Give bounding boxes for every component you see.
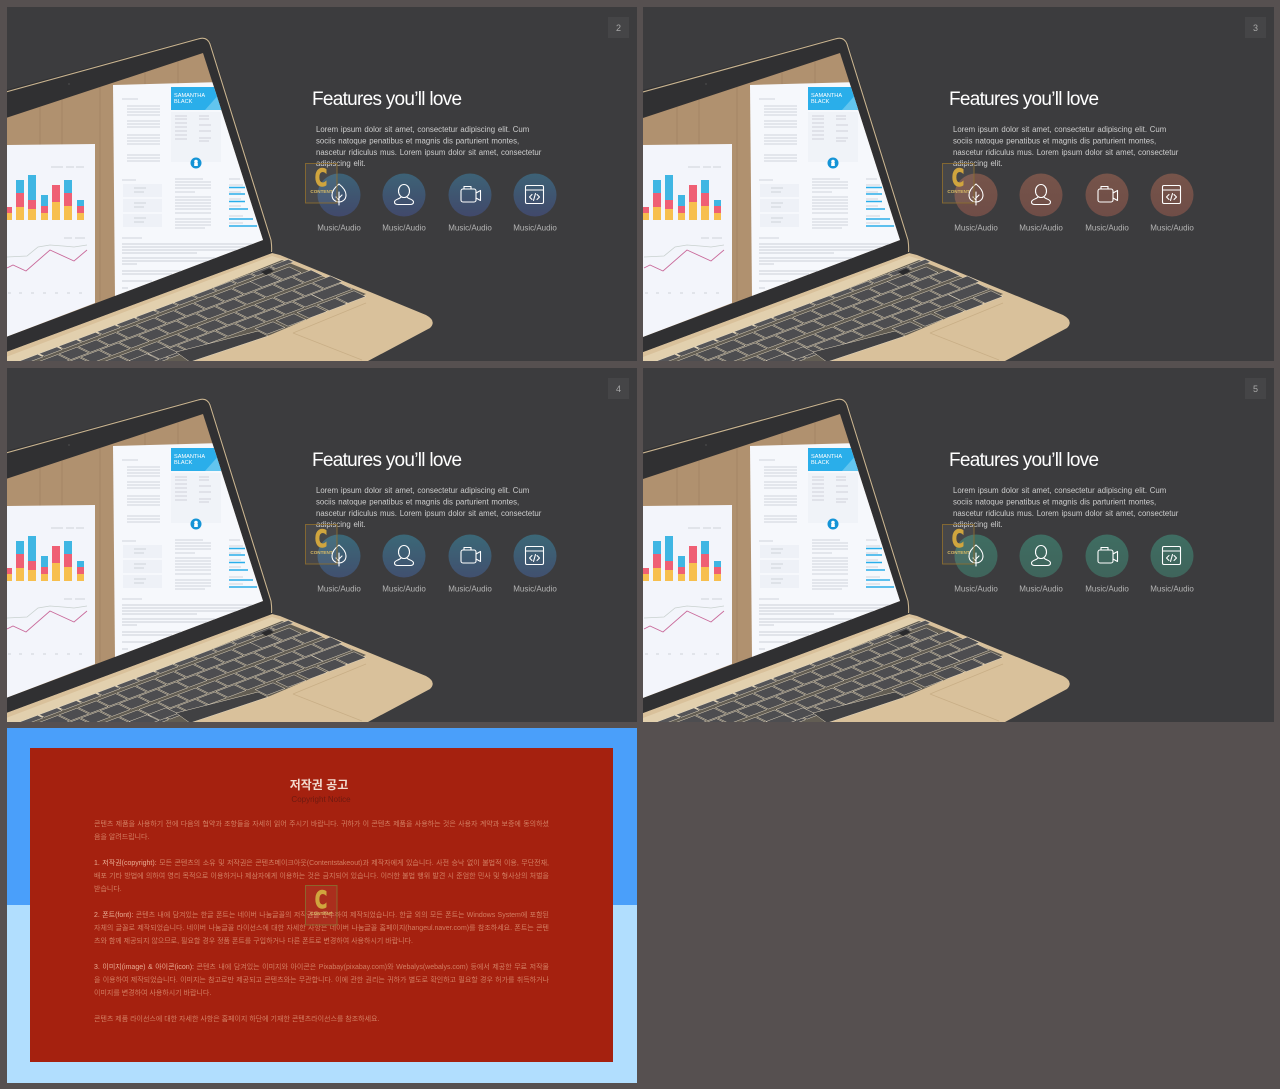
icon labels bbox=[317, 224, 557, 232]
watermark on notice slide bbox=[305, 885, 338, 926]
notice body text: 이미지를 변경하여 사용하시기 바랍니다. bbox=[94, 990, 211, 997]
body text: adipiscing elit. bbox=[316, 520, 366, 529]
body text: nascetur ridiculus mus. Lorem ipsum dolor sit amet, consectetur bbox=[953, 509, 1179, 518]
icon labels: Music/Audio bbox=[954, 584, 998, 594]
icon labels bbox=[317, 584, 557, 594]
watermark: C bbox=[315, 164, 327, 192]
body text: sociis natoque penatibus et magnis dis parturient montes, bbox=[953, 136, 1156, 146]
icon labels: Music/Audio bbox=[317, 224, 361, 232]
body text bbox=[316, 486, 542, 529]
notice body text: 콘텐츠 제품 라이선스에 대한 자세한 사항은 홈페이지 하단에 기재한 콘텐츠라이선스를 참조하세요. bbox=[94, 1016, 379, 1023]
watermark bbox=[942, 164, 974, 203]
icon labels: Music/Audio bbox=[317, 584, 361, 594]
notice body text: 배포 기타 방법에 의하여 영리 목적으로 이용하거나 제삼자에게 이용하는 것은 금지되어 있습니다. 이러한 불법 행위 발견 시 준엄한 민사 및 형사상의 처벌을 bbox=[94, 873, 549, 880]
page number: 4 bbox=[616, 384, 621, 394]
page number bbox=[608, 378, 629, 399]
icon row bbox=[318, 174, 556, 216]
body text: Lorem ipsum dolor sit amet, consectetur adipiscing elit. Cum bbox=[953, 125, 1166, 134]
body text: adipiscing elit. bbox=[953, 159, 1003, 168]
heading: Features you’ll love bbox=[312, 450, 461, 471]
panel: copyright notice slide bbox=[7, 728, 637, 1083]
icon row bbox=[954, 534, 1194, 578]
laptop mockup bbox=[643, 37, 1070, 395]
page number bbox=[1245, 378, 1266, 399]
notice body text: 콘텐츠 제품을 사용하기 전에 다음의 협약과 조항들을 자세히 읽어 주시기 바랍니다. 귀하가 이 콘텐츠 제품을 사용하는 것은 사용자 계약과 보증에 동의하셨 bbox=[94, 821, 549, 828]
icon labels bbox=[954, 224, 1194, 232]
watermark: CONTENT bbox=[310, 550, 333, 555]
body text: adipiscing elit. bbox=[953, 520, 1003, 529]
body text: Lorem ipsum dolor sit amet, consectetur adipiscing elit. Cum bbox=[316, 125, 529, 134]
watermark bbox=[942, 524, 974, 564]
icon labels: Music/Audio bbox=[954, 224, 998, 232]
red notice panel bbox=[30, 748, 613, 1062]
laptop mockup bbox=[6, 37, 433, 395]
laptop mockup bbox=[643, 398, 1070, 756]
notice body text: 자체의 글꼴로 제작되었습니다. 네이버 나눔글꼴 라이선스에 대한 자세한 사항은 네이버 나눔글꼴 홈페이지(hangeul.naver.com)를 참조하세요. 폰트는 콘텐 bbox=[94, 925, 549, 932]
page number: 2 bbox=[616, 23, 621, 33]
notice body text: 3. 이미지(image) & 아이콘(icon): 콘텐츠 내에 담겨있는 이미지와 아이콘은 Pixabay(pixabay.com)와 Webalys(webalys.com) 등에서 제공한 무료 저작물 bbox=[94, 964, 549, 971]
body text bbox=[316, 125, 542, 168]
heading: Features you’ll love bbox=[312, 89, 461, 110]
notice body text: 음을 알려드립니다. bbox=[94, 834, 149, 841]
icon row bbox=[318, 534, 556, 578]
icon labels: Music/Audio bbox=[1150, 584, 1194, 594]
panel: slide 1 bbox=[7, 7, 637, 361]
icon labels: Music/Audio bbox=[513, 584, 557, 594]
icon labels: Music/Audio bbox=[382, 224, 426, 232]
watermark: C bbox=[315, 525, 327, 553]
heading: Features you’ll love bbox=[949, 450, 1098, 471]
body text: nascetur ridiculus mus. Lorem ipsum dolor sit amet, consectetur bbox=[953, 148, 1179, 157]
icon labels: Music/Audio bbox=[1085, 224, 1129, 232]
body text: sociis natoque penatibus et magnis dis parturient montes, bbox=[316, 136, 519, 146]
page number: 5 bbox=[1253, 384, 1258, 394]
watermark on notice slide: C bbox=[315, 886, 327, 914]
body text: Lorem ipsum dolor sit amet, consectetur adipiscing elit. Cum bbox=[316, 486, 529, 495]
watermark on notice slide: CONTENT bbox=[310, 911, 333, 916]
notice body text: 2. 폰트(font): 콘텐츠 내에 담겨있는 한글 폰트는 네이버 나눔글꼴의 저작권을 준수하여 제작되었습니다. 한글 외의 모든 폰트는 Windows System에 포함된 bbox=[94, 912, 549, 919]
body text: adipiscing elit. bbox=[316, 159, 366, 168]
body text bbox=[953, 125, 1179, 168]
page number: 3 bbox=[1253, 23, 1258, 33]
heading: Features you’ll love bbox=[949, 89, 1098, 110]
body text bbox=[953, 486, 1179, 529]
watermark bbox=[306, 524, 337, 564]
page number bbox=[608, 17, 629, 38]
icon labels: Music/Audio bbox=[448, 224, 492, 232]
icon labels: Music/Audio bbox=[513, 224, 557, 232]
watermark: CONTENT bbox=[947, 550, 970, 555]
watermark bbox=[306, 164, 337, 203]
watermark: C bbox=[952, 164, 964, 192]
panel: slide 4 bbox=[643, 368, 1274, 722]
icon labels: Music/Audio bbox=[1150, 224, 1194, 232]
page number bbox=[1245, 17, 1266, 38]
notice heading: 저작권 공고 bbox=[290, 778, 348, 792]
icon labels: Music/Audio bbox=[448, 584, 492, 594]
icon labels bbox=[954, 584, 1194, 594]
notice body text: 츠와 함께 제공되지 않으므로, 필요할 경우 정품 폰트를 구입하거나 다른 폰트로 변경하여 사용하시기 바랍니다. bbox=[94, 938, 413, 945]
body text: Lorem ipsum dolor sit amet, consectetur adipiscing elit. Cum bbox=[953, 486, 1166, 495]
body text: sociis natoque penatibus et magnis dis parturient montes, bbox=[953, 498, 1156, 506]
icon row bbox=[954, 174, 1194, 216]
icon labels: Music/Audio bbox=[1019, 224, 1063, 232]
panel: slide 2 bbox=[643, 7, 1274, 361]
laptop mockup bbox=[6, 398, 433, 756]
notice body text: 을 이용하여 제작되었습니다. 이미지는 참고로만 제공되고 콘텐츠와는 무관합니다. 이에 관한 권리는 귀하가 별도로 확인하고 필요할 경우 허가를 취득하거나 bbox=[94, 977, 549, 984]
notice body text: 1. 저작권(copyright): 모든 콘텐츠의 소유 및 저작권은 콘텐츠메이크아웃(Contentstakeout)과 제작자에게 있습니다. 사전 승낙 없이 불법적 이용, 무단전재, bbox=[94, 860, 549, 867]
watermark: C bbox=[952, 525, 964, 553]
notice body text bbox=[94, 820, 549, 1023]
notice subheading: Copyright Notice bbox=[291, 795, 351, 804]
notice body text: 받습니다. bbox=[94, 886, 122, 893]
icon labels: Music/Audio bbox=[1019, 584, 1063, 594]
watermark: CONTENT bbox=[947, 189, 970, 194]
icon labels: Music/Audio bbox=[382, 584, 426, 594]
panel: slide 3 bbox=[7, 368, 637, 722]
body text: sociis natoque penatibus et magnis dis parturient montes, bbox=[316, 498, 519, 506]
body text: nascetur ridiculus mus. Lorem ipsum dolor sit amet, consectetur bbox=[316, 509, 542, 518]
body text: nascetur ridiculus mus. Lorem ipsum dolor sit amet, consectetur bbox=[316, 148, 542, 157]
watermark: CONTENT bbox=[310, 189, 333, 194]
icon labels: Music/Audio bbox=[1085, 584, 1129, 594]
